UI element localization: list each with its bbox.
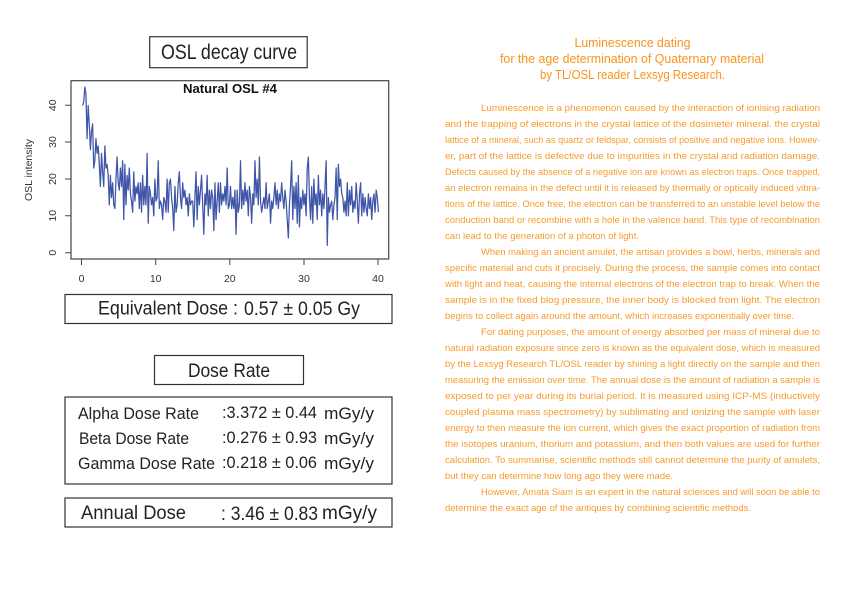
article body text: For dating purposes, the amount of energy absorbed per mass of mineral due to xyxy=(481,327,820,337)
heading box: Dose Rate xyxy=(154,356,304,384)
result box: Annual Dose: : 3.46 ± 0.83 xyxy=(221,504,318,525)
x axis tick labels: 30 xyxy=(298,273,310,285)
row: Gamma Dose Rate: mGy/y xyxy=(324,454,375,473)
y axis tick labels: 0 xyxy=(47,250,59,256)
heading box: OSL decay curve xyxy=(150,37,307,68)
article body text: determine the exact age of the antiques by combining scientific methods. xyxy=(445,503,751,513)
article body text: with light and heat, causing the internal electrons of the electron trap to break. When the xyxy=(444,279,820,289)
row: Alpha Dose Rate xyxy=(78,403,375,423)
article title: for the age determination of Quaternary material xyxy=(500,52,764,66)
article body text: natural radiation exposure since zero is known as the equivalent dose, which is measured xyxy=(445,343,820,353)
row: Alpha Dose Rate: Alpha Dose Rate xyxy=(78,404,199,423)
article title: by TL/OSL reader Lexsyg Research. xyxy=(540,68,725,82)
article body text: begins to collect again around the amount, which increases exponentially over time. xyxy=(445,311,794,321)
x axis tick labels: 0 xyxy=(79,273,85,285)
heading box: OSL decay curve: OSL decay curve xyxy=(161,41,297,64)
article body text: can lead to the generation of a photon of light. xyxy=(445,231,639,241)
result box: Equivalent Dose xyxy=(65,294,392,324)
y axis tick labels: 20 xyxy=(47,173,59,185)
chart title: Natural OSL #4 xyxy=(183,81,278,96)
article body text: measuring the emission over time. The annual dose is the amount of radiation a sample is xyxy=(445,375,820,385)
article body text: coupled plasma mass spectrometry) by sublimating and ionizing the sample with laser xyxy=(445,407,820,417)
article title: Luminescence dating xyxy=(574,36,691,50)
result box: Equivalent Dose: 0.57 ± 0.05 Gy xyxy=(244,299,360,320)
article body text: lattice of a mineral, such as quartz or feldspar, consists of positive and negative ions. Howev- xyxy=(445,135,820,145)
data line: OSL signal xyxy=(83,87,378,245)
x axis tick labels: 40 xyxy=(372,273,384,285)
article body text: However, Amata Siam is an expert in the natural sciences and will soon be able to xyxy=(481,487,820,497)
result box: Annual Dose xyxy=(65,498,392,527)
article body text: When making an ancient amulet, the artisan provides a bowl, herbs, minerals and xyxy=(481,247,820,257)
y axis title: OSL intensity xyxy=(23,138,35,201)
article body text: tions of the lattice. Once free, the electron can be transferred to an unstable level below the xyxy=(445,199,820,209)
panel: dose rates xyxy=(65,397,392,484)
row: Beta Dose Rate: :0.276 ± 0.93 xyxy=(222,428,317,447)
article body text: energy to then measure the ion current, which gives the exact proportion of radiation from xyxy=(445,423,820,433)
row: Beta Dose Rate xyxy=(79,428,375,448)
line chart: Natural OSL #4 xyxy=(23,81,389,285)
row: Alpha Dose Rate: mGy/y xyxy=(324,404,375,423)
x axis tick labels: 10 xyxy=(150,273,162,285)
x axis tick labels xyxy=(79,273,384,285)
result box: Annual Dose: mGy/y xyxy=(322,503,377,524)
article title xyxy=(500,36,764,82)
y axis tick labels: 40 xyxy=(47,99,59,111)
y axis tick labels: 10 xyxy=(47,210,59,222)
article body text: and the trapping of electrons in the crystal lattice of the dosimeter mineral. the crystal xyxy=(445,119,820,129)
article body text xyxy=(444,103,820,513)
row: Gamma Dose Rate: Gamma Dose Rate xyxy=(78,454,215,473)
row: Beta Dose Rate: Beta Dose Rate xyxy=(79,429,189,448)
article body text: by the Lexsyg Research TL/OSL reader by shining a light directly on the sample and then xyxy=(445,359,820,369)
heading box: Dose Rate: Dose Rate xyxy=(188,361,270,382)
x axis ticks xyxy=(82,259,378,265)
article body text: the isotopes uranium, thorium and potassium, and then both values are used for further xyxy=(445,439,820,449)
article body text: but they can determine how long ago they were made. xyxy=(445,471,673,481)
row: Gamma Dose Rate xyxy=(78,453,375,473)
article body text: calculation. To summarise, scientific methods still cannot determine the purity of amulets, xyxy=(445,455,820,465)
y axis ticks xyxy=(65,105,71,253)
y axis tick labels: 30 xyxy=(47,136,59,148)
article body text: er, part of the lattice is defective due to impurities in the crystal and radiation damage. xyxy=(445,151,820,161)
result box: Annual Dose: Annual Dose xyxy=(81,503,186,524)
article body text: exposed to per year during its burial period. It is measured using ICP-MS (inductively xyxy=(445,391,820,401)
x axis tick labels: 20 xyxy=(224,273,236,285)
plot frame xyxy=(71,81,389,259)
article body text: an electron remains in the defect until it is released by thermally or optically induced vibra- xyxy=(445,183,820,193)
article body text: sample is in the fixed blog pressure, the inner body is blocked from light. The electron xyxy=(445,295,820,305)
row: Gamma Dose Rate: :0.218 ± 0.06 xyxy=(222,453,317,472)
article body text: conduction band or recombine with a hole in the valence band. This type of recombination xyxy=(445,215,820,225)
article body text: Luminescence is a phenomenon caused by the interaction of ionising radiation xyxy=(481,103,820,113)
result box: Equivalent Dose: Equivalent Dose : xyxy=(98,298,238,320)
y axis tick labels xyxy=(47,99,59,256)
article body text: specific material and cuts it precisely. During the process, the sample comes into contact xyxy=(445,263,820,273)
article body text: Defects caused by the absence of a negative ion are known as electron traps. Once trapped, xyxy=(445,167,820,177)
row: Beta Dose Rate: mGy/y xyxy=(324,429,375,448)
row: Alpha Dose Rate: :3.372 ± 0.44 xyxy=(222,403,317,422)
